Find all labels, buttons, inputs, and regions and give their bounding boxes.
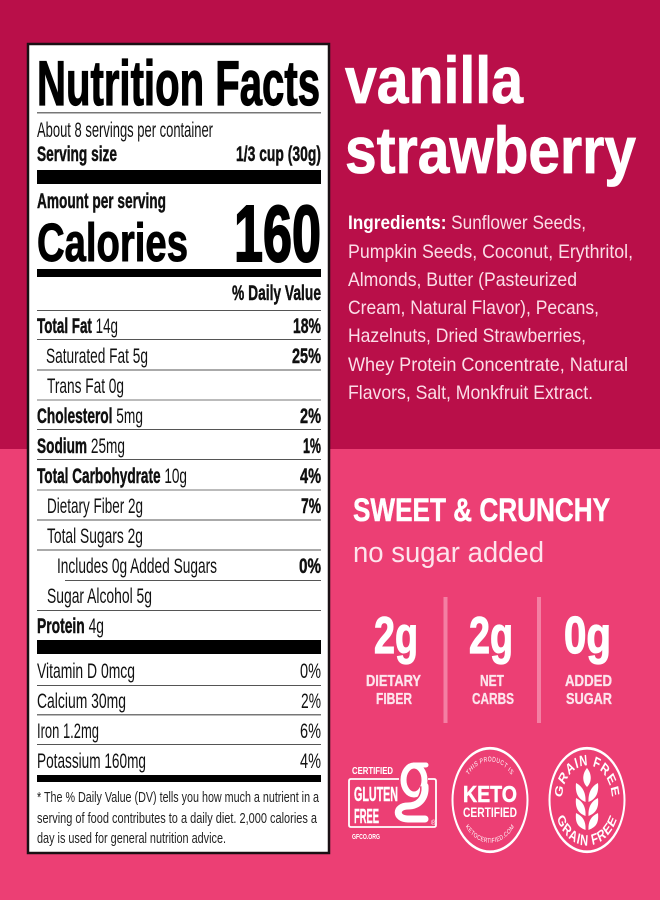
table: nutrients: 1% bbox=[303, 435, 321, 458]
text: ingredients: Flavors, Salt, Monkfruit Extract. bbox=[348, 382, 593, 404]
icon: gluten free badge: FREE bbox=[354, 806, 379, 828]
icon: gluten free badge: GFCO.ORG bbox=[352, 832, 380, 841]
icon: grain free badge: GRAIN FREE bbox=[558, 815, 617, 846]
table: vitamins and minerals: 4% bbox=[300, 750, 321, 773]
icon: wheat bbox=[576, 768, 598, 830]
table: nutrients bbox=[37, 315, 321, 638]
stat: dietary fiber bbox=[366, 607, 422, 708]
table: nutrients: Saturated Fat 5g bbox=[46, 345, 148, 368]
text: servings bbox=[37, 119, 321, 166]
panel: bottom pink background bbox=[0, 449, 660, 900]
table: nutrients: Sodium 25mg bbox=[37, 435, 125, 458]
text: daily value header: % Daily Value bbox=[232, 282, 321, 305]
table: vitamins and minerals: Iron 1.2mg bbox=[37, 720, 99, 743]
table: nutrients: 2% bbox=[300, 405, 321, 428]
icon: keto certified badge bbox=[452, 746, 528, 854]
text: calories: 160 bbox=[234, 189, 321, 278]
table: nutrients: 0% bbox=[299, 555, 321, 578]
table: nutrients: Dietary Fiber 2g bbox=[47, 495, 143, 518]
text: ingredients: Cream, Natural Flavor), Pecans, bbox=[348, 297, 599, 319]
title: flavor name: vanilla bbox=[345, 43, 524, 117]
text: calories: Amount per serving bbox=[37, 190, 166, 213]
table: nutrients: Total Fat 14g bbox=[37, 315, 118, 338]
table: nutrients: Cholesterol 5mg bbox=[37, 405, 143, 428]
stat: net carbs: CARBS bbox=[472, 691, 514, 708]
table: nutrients: Total Carbohydrate 10g bbox=[37, 465, 187, 488]
table: vitamins and minerals: 2% bbox=[301, 690, 321, 713]
stat: added sugar: SUGAR bbox=[566, 691, 612, 708]
stat: net carbs: NET bbox=[480, 673, 504, 690]
table: nutrients: 25% bbox=[292, 345, 321, 368]
stat: dietary fiber: FIBER bbox=[376, 691, 412, 708]
stat: dietary fiber: DIETARY bbox=[366, 673, 422, 690]
stat: dietary fiber: 2g bbox=[374, 607, 418, 665]
text: ingredients: Ingredients: Sunflower Seeds, bbox=[348, 212, 586, 234]
table: nutrients: Includes 0g Added Sugars bbox=[57, 555, 217, 578]
heading: Nutrition Facts: Nutrition Facts bbox=[37, 49, 320, 119]
text: footnote: * The % Daily Value (DV) tells you how much a nutrient in a bbox=[37, 789, 319, 806]
stat: net carbs: 2g bbox=[469, 607, 513, 665]
icon: keto certified badge: KETO bbox=[463, 781, 517, 807]
table: nutrients: Trans Fat 0g bbox=[47, 375, 124, 398]
table: nutrients: Sugar Alcohol 5g bbox=[47, 585, 152, 608]
text: calories: Calories bbox=[37, 213, 188, 273]
text: servings: 1/3 cup (30g) bbox=[236, 143, 321, 166]
text: no sugar added: no sugar added bbox=[353, 537, 544, 569]
text: ingredients bbox=[348, 212, 633, 404]
icon: gluten free badge: CERTIFIED bbox=[352, 766, 393, 777]
table: vitamins and minerals bbox=[37, 660, 321, 773]
heading: sweet and crunchy: SWEET & CRUNCHY bbox=[353, 492, 610, 528]
stat: added sugar bbox=[564, 607, 612, 708]
icon: keto certified badge: CERTIFIED bbox=[463, 804, 517, 820]
table: vitamins and minerals: 6% bbox=[300, 720, 321, 743]
panel: nutrition facts label bbox=[28, 44, 329, 853]
table: vitamins and minerals: Calcium 30mg bbox=[37, 690, 126, 713]
table: vitamins and minerals: Vitamin D 0mcg bbox=[37, 660, 135, 683]
text: ingredients: Hazelnuts, Dried Strawberries, bbox=[348, 325, 586, 347]
panel: top crimson background bbox=[0, 0, 660, 449]
text: footnote: day is used for general nutrition advice. bbox=[37, 830, 226, 847]
title: flavor name bbox=[345, 43, 636, 187]
text: ingredients: Almonds, Butter (Pasteurized bbox=[348, 269, 577, 291]
icon: gluten free badge: ® bbox=[431, 819, 437, 827]
icon: keto certified badge: KETOCERTIFIED.COM bbox=[466, 824, 514, 843]
text: ingredients: Pumpkin Seeds, Coconut, Erythritol, bbox=[348, 241, 633, 263]
stat: added sugar: ADDED bbox=[565, 673, 612, 690]
icon: gluten free badge: GLUTEN bbox=[354, 784, 398, 806]
table: nutrients: Protein 4g bbox=[37, 615, 104, 638]
icon: grain free badge bbox=[548, 746, 626, 854]
text: ingredients: Whey Protein Concentrate, Natural bbox=[348, 354, 628, 376]
table: vitamins and minerals: Potassium 160mg bbox=[37, 750, 146, 773]
text: footnote: serving of food contributes to a daily diet. 2,000 calories a bbox=[37, 810, 317, 827]
text: servings: About 8 servings per container bbox=[37, 119, 213, 142]
icon: gluten free badge bbox=[349, 765, 437, 841]
table: nutrients: 7% bbox=[301, 495, 321, 518]
table: vitamins and minerals: 0% bbox=[300, 660, 321, 683]
icon: grain free badge: GRAIN FREE bbox=[555, 754, 620, 796]
stat: added sugar: 0g bbox=[564, 607, 611, 665]
icon: keto certified badge: THIS PRODUCT IS bbox=[466, 756, 514, 774]
text: footnote bbox=[37, 789, 319, 847]
table: nutrients: 18% bbox=[293, 315, 321, 338]
stat: net carbs bbox=[469, 607, 514, 708]
table: nutrients: Total Sugars 2g bbox=[47, 525, 143, 548]
text: servings: Serving size bbox=[37, 143, 117, 166]
text: calories bbox=[37, 189, 321, 278]
table: nutrients: 4% bbox=[300, 465, 321, 488]
